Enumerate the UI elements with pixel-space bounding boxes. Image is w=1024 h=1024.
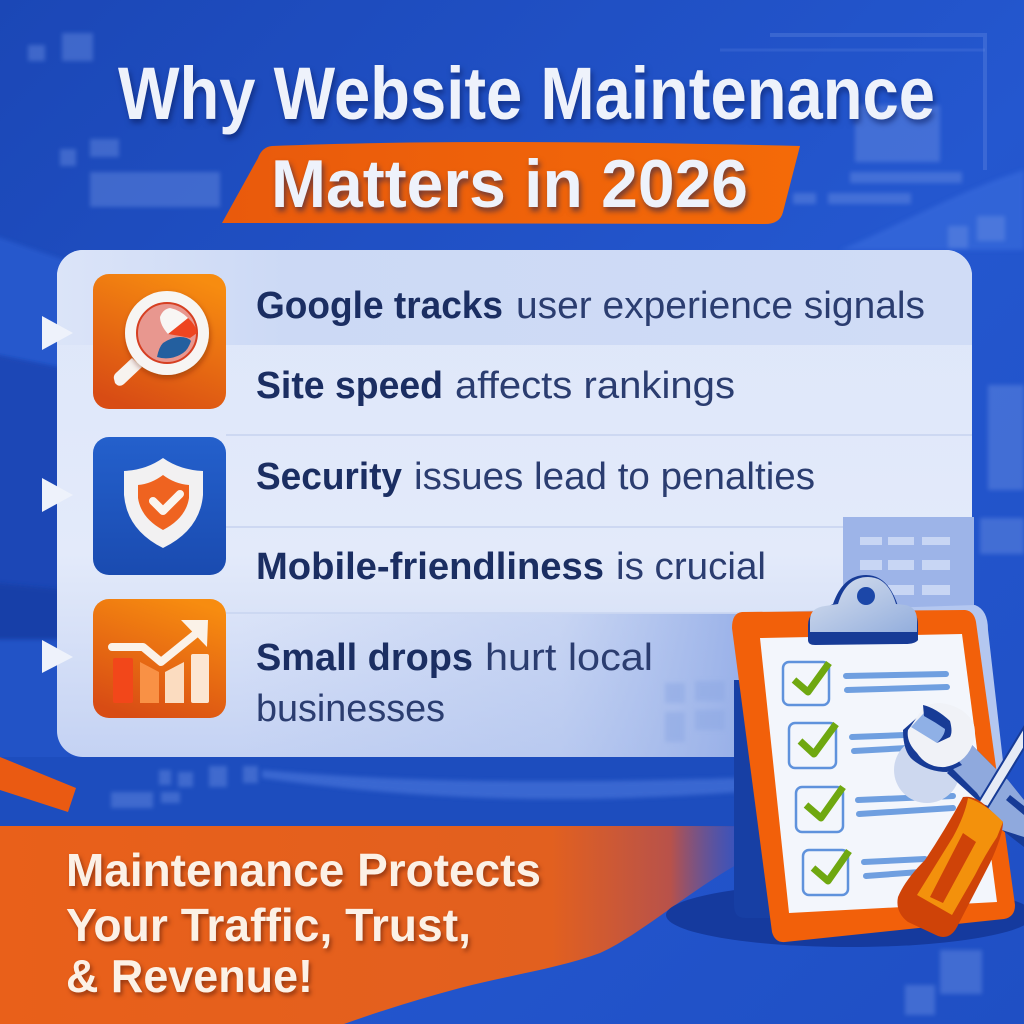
- bottom orange band: [0, 826, 745, 1024]
- checklist item 4: [803, 850, 925, 895]
- text: mobile: is crucial: [616, 546, 766, 588]
- checklist item 2: [789, 723, 907, 768]
- text: site speed: affects rankings: [455, 365, 735, 407]
- arrow marker 3: [42, 640, 73, 673]
- text: security: Security: [256, 456, 402, 498]
- text: Google tracks: user experience signals: [516, 285, 925, 327]
- closing message: Maintenance Protects: [66, 844, 541, 896]
- text: businesses: businesses: [256, 688, 445, 730]
- title: Why Website Maintenance: [118, 52, 935, 135]
- icon: wrench: [894, 703, 1024, 847]
- icon: screwdriver: [897, 727, 1024, 937]
- icon: growth bar chart: [93, 599, 226, 718]
- text: mobile: [256, 546, 766, 588]
- text: small drops: [256, 637, 653, 679]
- clipboard with checklist and tools: [666, 575, 1024, 947]
- background block graphic: [665, 681, 725, 742]
- clipboard board: [732, 610, 1015, 942]
- subtitle ribbon: [222, 142, 800, 224]
- arrow marker 2: [42, 478, 73, 512]
- text: site speed: [256, 365, 735, 407]
- closing message: & Revenue!: [66, 950, 313, 1002]
- clipboard paper: [760, 634, 997, 913]
- icon: security shield: [93, 437, 226, 575]
- text: security: issues lead to penalties: [414, 456, 815, 498]
- text: Google tracks: [256, 285, 925, 327]
- clipboard clip: [808, 575, 918, 645]
- checklist item 3: [796, 787, 953, 832]
- closing message: [66, 844, 541, 1002]
- icon: magnifier with pie chart: [93, 274, 226, 409]
- background table graphic: [843, 517, 974, 642]
- text: mobile: Mobile-friendliness: [256, 546, 604, 588]
- text: small drops: hurt local: [485, 637, 653, 679]
- subtitle: Matters in 2026: [271, 146, 748, 222]
- arrow marker 1: [42, 316, 73, 350]
- text: Google tracks: Google tracks: [256, 285, 503, 327]
- checklist item 1: [783, 662, 947, 705]
- orange accent stripe: [0, 757, 76, 812]
- text: small drops: Small drops: [256, 637, 473, 679]
- closing message: Your Traffic, Trust,: [66, 899, 471, 951]
- text: site speed: Site speed: [256, 365, 443, 407]
- panel: reasons list: [42, 250, 974, 757]
